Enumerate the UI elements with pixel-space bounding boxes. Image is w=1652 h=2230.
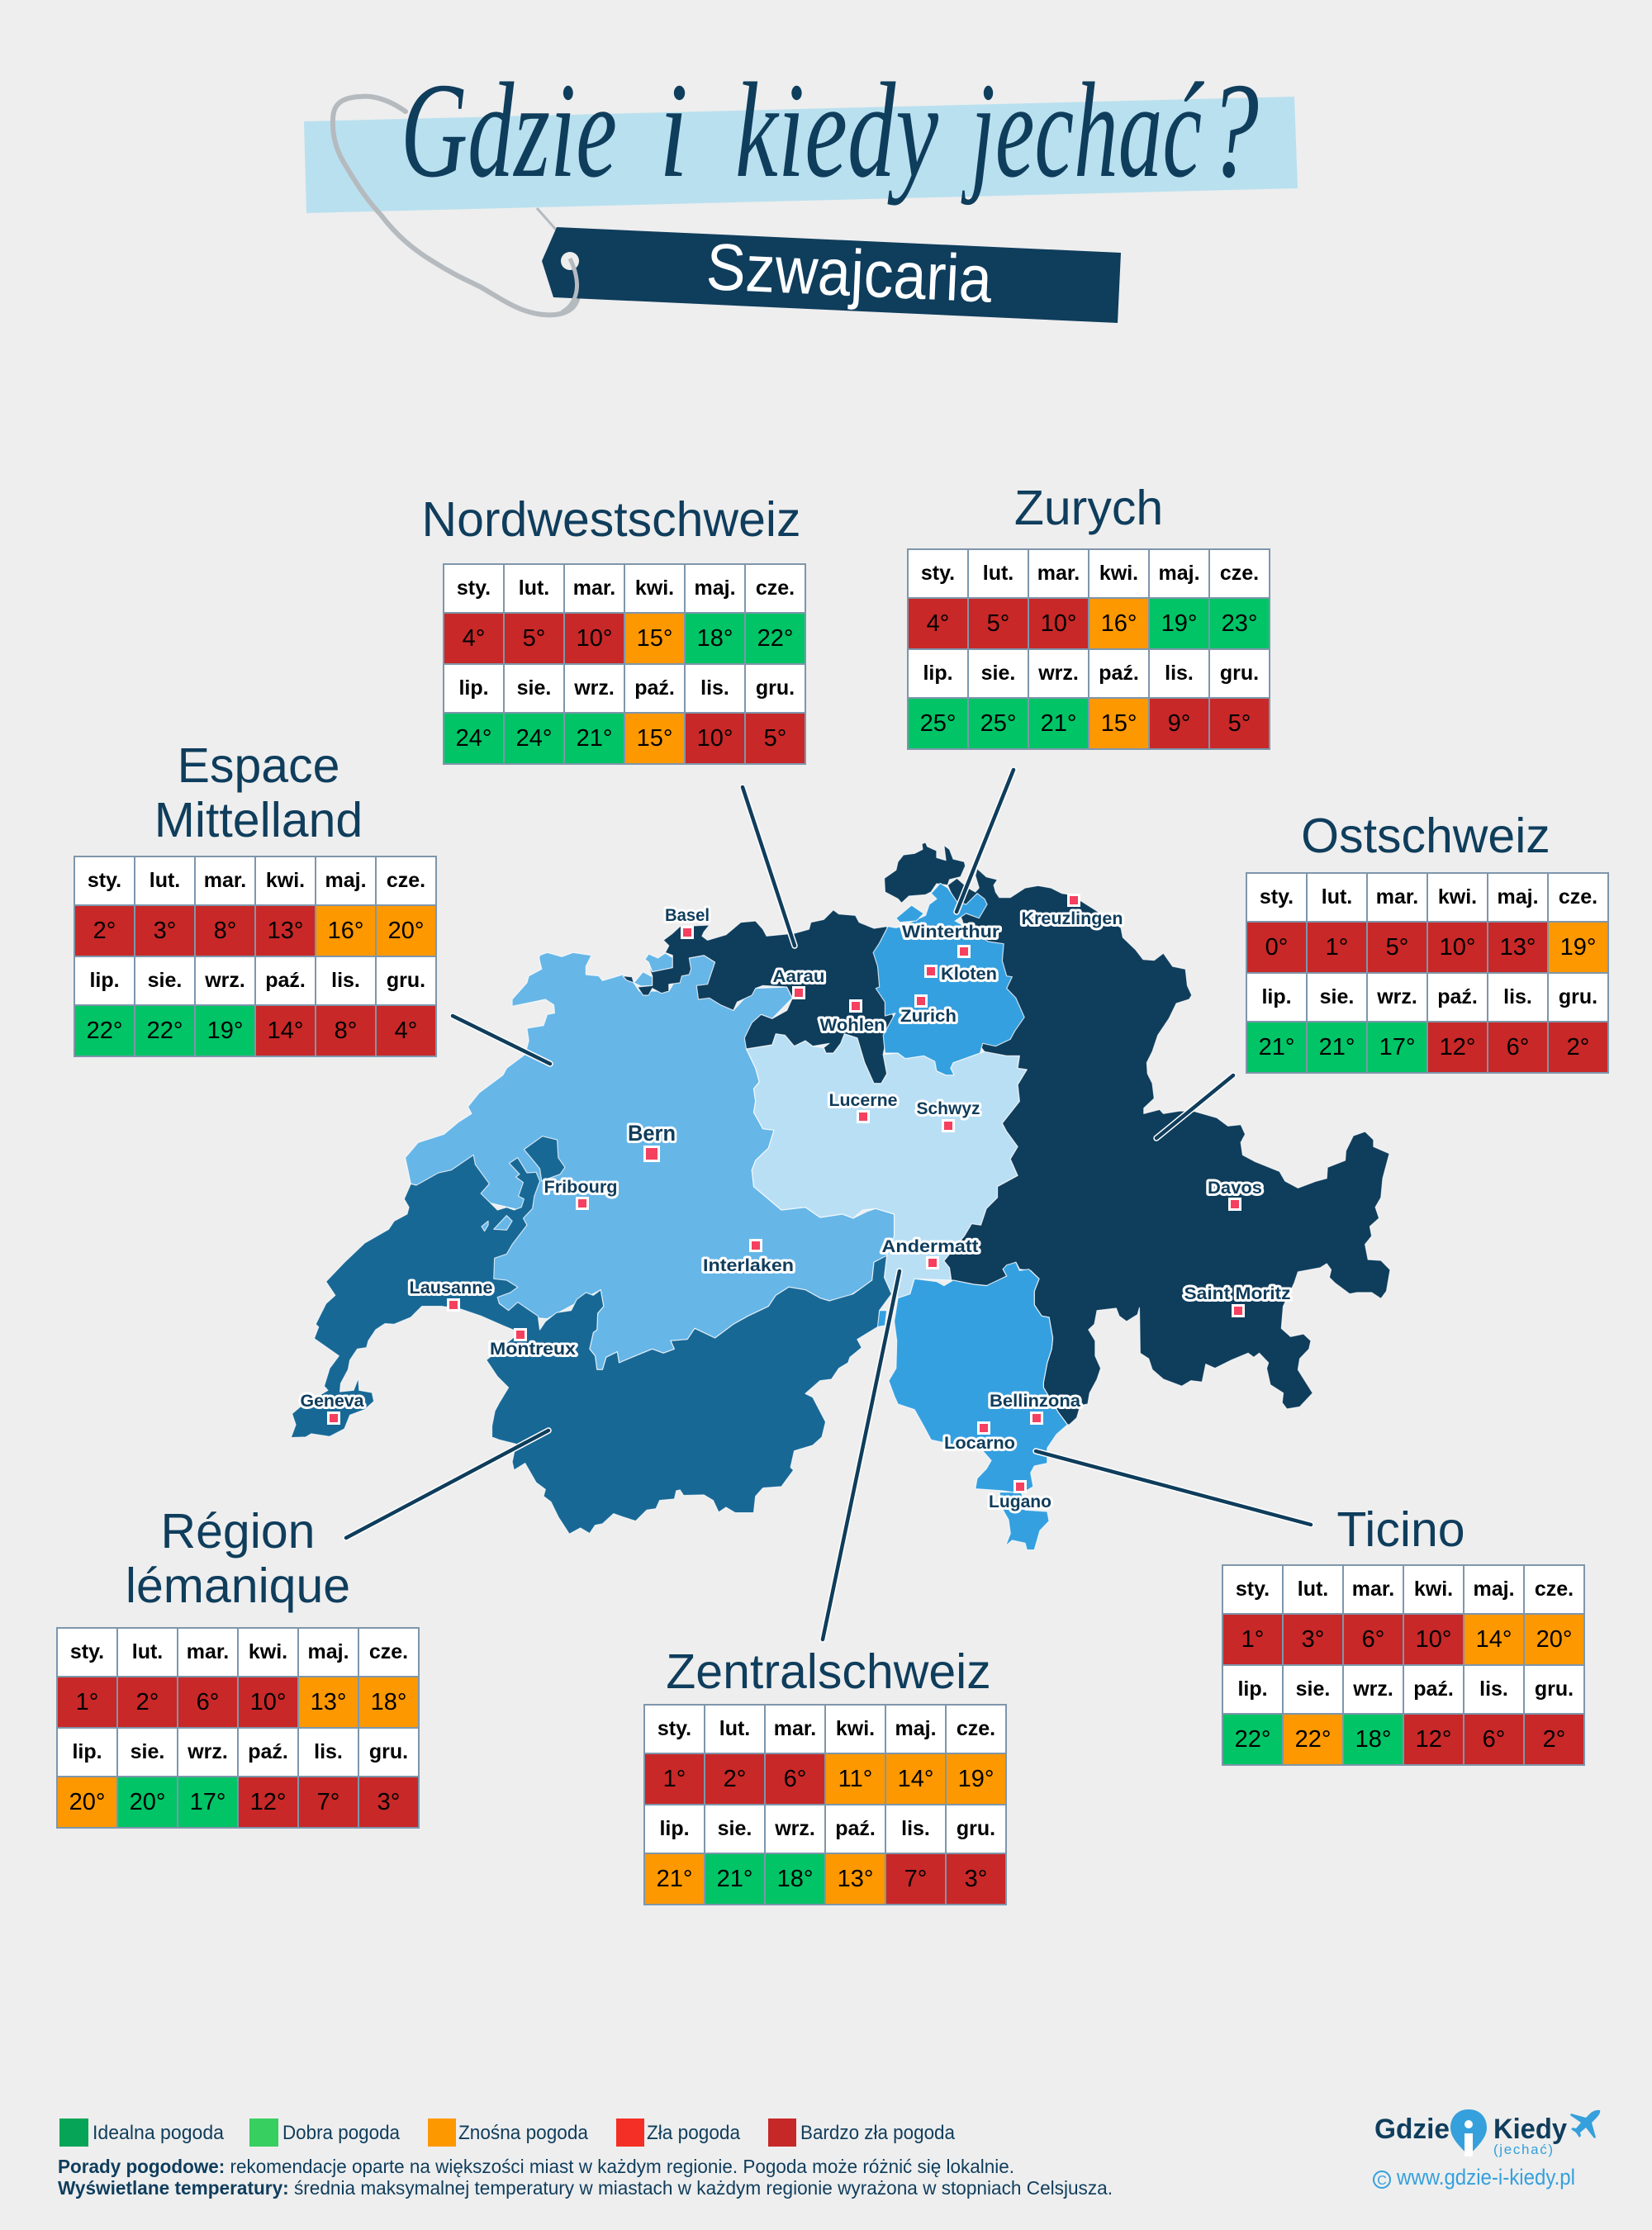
- table: Nordwestschweiz: 21°: [577, 725, 612, 752]
- table: Ostschweiz: 10°: [1440, 933, 1475, 960]
- table: Zurych: paź.: [1099, 662, 1139, 685]
- table: Ticino: kwi.: [1414, 1578, 1453, 1601]
- string end: [562, 259, 577, 312]
- title: jechać: [961, 55, 1204, 206]
- table: Ostschweiz: [1246, 872, 1609, 1074]
- table: Région lémanique: 13°: [311, 1688, 346, 1715]
- table: Espace Mittelland: 4°: [395, 1018, 417, 1044]
- city: Fribourg: [544, 1178, 618, 1210]
- table: Ostschweiz: 2°: [1567, 1034, 1589, 1060]
- city: Lausanne: [410, 1279, 492, 1312]
- city: Kreuzlingen: Kreuzlingen: [1021, 909, 1123, 928]
- city: Locarno: Locarno: [944, 1434, 1015, 1453]
- table: Zurych: wrz.: [1038, 662, 1079, 685]
- table: Espace Mittelland: 14°: [268, 1018, 303, 1044]
- city: Kloten: Kloten: [941, 965, 997, 984]
- table: Zentralschweiz: 6°: [784, 1766, 806, 1792]
- city: Davos: [1208, 1179, 1262, 1211]
- title: Gdzie: [401, 55, 617, 206]
- panel: Nordwestschweiz: [421, 492, 806, 765]
- heading: Espace Mittelland: Espace: [178, 738, 339, 793]
- city: Basel: Basel: [665, 906, 710, 925]
- table: Ostschweiz: paź.: [1437, 985, 1478, 1008]
- table: Zurych: lut.: [983, 562, 1014, 585]
- region: Région lémanique: [291, 1136, 891, 1534]
- legend: Idealna pogoda: [59, 2118, 225, 2147]
- heading: Nordwestschweiz: Nordwestschweiz: [421, 492, 801, 547]
- table: Ticino: 22°: [1235, 1726, 1270, 1753]
- table: Zentralschweiz: gru.: [957, 1817, 995, 1840]
- table: Zurych: 15°: [1101, 710, 1137, 737]
- table: Espace Mittelland: kwi.: [266, 869, 305, 892]
- table: Ticino: 18°: [1355, 1726, 1391, 1753]
- table: Zentralschweiz: lis.: [901, 1817, 930, 1840]
- city: Lucerne: [829, 1091, 897, 1123]
- table: Région lémanique: 17°: [190, 1789, 225, 1815]
- table: Ticino: sty.: [1236, 1578, 1270, 1601]
- heading: Espace Mittelland: [154, 738, 363, 847]
- table: Nordwestschweiz: 15°: [637, 624, 672, 651]
- table: Espace Mittelland: 2°: [93, 917, 116, 943]
- city: Lucerne: Lucerne: [829, 1091, 897, 1110]
- legend: Bardzo zła pogoda: [768, 2118, 956, 2147]
- table: Ticino: mar.: [1352, 1578, 1394, 1601]
- table: Région lémanique: 18°: [371, 1688, 406, 1715]
- table: Zurych: sie.: [981, 662, 1015, 685]
- table: Ticino: 6°: [1362, 1625, 1384, 1652]
- table: Ticino: lis.: [1479, 1677, 1508, 1701]
- table: Zurych: 4°: [927, 610, 949, 636]
- table: Ticino: 12°: [1416, 1726, 1451, 1753]
- table: Région lémanique: lip.: [72, 1740, 102, 1763]
- icon: copyright: C: [1377, 2174, 1387, 2188]
- table: Nordwestschweiz: 22°: [757, 624, 793, 651]
- region: Ostschweiz: [885, 842, 1390, 1425]
- city: Saint Moritz: Saint Moritz: [1184, 1284, 1290, 1303]
- table: Nordwestschweiz: 24°: [516, 725, 552, 752]
- leader line: Zentralschweiz: [823, 1271, 900, 1639]
- table: Zurych: 16°: [1101, 610, 1137, 636]
- city: Schwyz: [917, 1099, 980, 1132]
- table: Zentralschweiz: mar.: [774, 1717, 816, 1740]
- table: Région lémanique: sty.: [70, 1640, 104, 1663]
- table: Espace Mittelland: 20°: [388, 917, 424, 943]
- table: Ostschweiz: 17°: [1379, 1034, 1415, 1060]
- table: Espace Mittelland: 3°: [154, 917, 176, 943]
- legend: Idealna pogoda: Idealna pogoda: [93, 2122, 225, 2144]
- city: Montreux: Montreux: [490, 1340, 576, 1359]
- table: Zurych: [907, 548, 1270, 750]
- table: Zentralschweiz: lip.: [659, 1817, 690, 1840]
- table: Ticino: lip.: [1237, 1677, 1268, 1701]
- table: Région lémanique: gru.: [369, 1740, 408, 1763]
- city: Bellinzona: Bellinzona: [990, 1392, 1080, 1411]
- table: Ostschweiz: 5°: [1386, 933, 1408, 960]
- table: Nordwestschweiz: 24°: [456, 725, 491, 752]
- heading: Zentralschweiz: Zentralschweiz: [666, 1644, 991, 1699]
- table: Zentralschweiz: [643, 1704, 1007, 1905]
- city: Andermatt: [882, 1237, 979, 1269]
- city: Winterthur: [902, 923, 999, 958]
- legend: [59, 2118, 956, 2147]
- map of Switzerland: [291, 842, 1390, 1550]
- table: Nordwestschweiz: paź.: [634, 676, 675, 700]
- table: Zentralschweiz: sty.: [657, 1717, 691, 1740]
- city: Andermatt: Andermatt: [882, 1237, 979, 1256]
- table: Zentralschweiz: 3°: [965, 1865, 987, 1891]
- legend: Zła pogoda: Zła pogoda: [647, 2122, 741, 2144]
- legend: Zła pogoda: [616, 2118, 741, 2147]
- table: Région lémanique: paź.: [248, 1740, 288, 1763]
- heading: Région lémanique: Région: [161, 1504, 315, 1559]
- table: Région lémanique: 12°: [250, 1789, 286, 1815]
- table: Espace Mittelland: wrz.: [205, 969, 245, 992]
- table: Zentralschweiz: paź.: [835, 1817, 876, 1840]
- city: Zurich: Zurich: [900, 1007, 957, 1026]
- table: Espace Mittelland: 8°: [214, 917, 236, 943]
- table: Espace Mittelland: 19°: [207, 1018, 243, 1044]
- table: Ostschweiz: lut.: [1322, 885, 1352, 909]
- table: Région lémanique: lis.: [314, 1740, 343, 1763]
- table: Ticino: 14°: [1476, 1625, 1512, 1652]
- table: Espace Mittelland: sty.: [88, 869, 121, 892]
- table: Ostschweiz: lip.: [1261, 985, 1292, 1008]
- table: Ostschweiz: maj.: [1497, 885, 1539, 909]
- table: Ostschweiz: 1°: [1326, 933, 1348, 960]
- table: Zurych: 10°: [1041, 610, 1076, 636]
- table: Ticino: gru.: [1535, 1677, 1574, 1701]
- table: Zentralschweiz: 13°: [838, 1865, 873, 1891]
- table: Ostschweiz: 19°: [1560, 933, 1596, 960]
- table: Zentralschweiz: 19°: [958, 1766, 994, 1792]
- logo word: Gdzie: Gdzie: [1374, 2114, 1450, 2145]
- logo: [1374, 2109, 1600, 2190]
- note: displayed temperatures: Wyświetlane temperatury: średnia maksymalnej temperatury w miastach w każdym regionie wyrażona w stopniach Celsjusza.: [58, 2177, 1113, 2199]
- table: Ostschweiz: lis.: [1503, 985, 1532, 1008]
- table: Ticino: 10°: [1416, 1625, 1451, 1652]
- table: Zentralschweiz: sie.: [718, 1817, 752, 1840]
- table: Ticino: maj.: [1473, 1578, 1515, 1601]
- heading: Région lémanique: [126, 1504, 350, 1613]
- table: Nordwestschweiz: sty.: [457, 576, 491, 600]
- panel: Ostschweiz: [1246, 809, 1609, 1074]
- heading: Espace Mittelland: Mittelland: [154, 793, 363, 847]
- panel: Espace Mittelland: [74, 738, 437, 1057]
- table: Zurych: lis.: [1165, 662, 1194, 685]
- table: Ticino: 20°: [1536, 1625, 1572, 1652]
- table: Zentralschweiz: maj.: [895, 1717, 937, 1740]
- string loop: [333, 97, 578, 315]
- city: Wohlen: [819, 999, 885, 1035]
- table: Nordwestschweiz: 15°: [637, 725, 672, 752]
- note: weather advice: Porady pogodowe: rekomendacje oparte na większości miast w każdym regionie. Pogoda może różnić się lokalnie.: [58, 2156, 1014, 2177]
- city: Geneva: [301, 1392, 364, 1425]
- leader line: Nordwestschweiz: [743, 787, 795, 946]
- subtitle: Szwajcaria: [705, 230, 994, 316]
- table: Espace Mittelland: cze.: [387, 869, 425, 892]
- table: Zurych: 23°: [1222, 610, 1257, 636]
- city: Bern: Bern: [628, 1121, 676, 1146]
- table: Nordwestschweiz: lip.: [458, 676, 489, 700]
- table: Ticino: paź.: [1413, 1677, 1454, 1701]
- table: Nordwestschweiz: maj.: [694, 576, 736, 600]
- legend: Znośna pogoda: [428, 2118, 589, 2147]
- table: Nordwestschweiz: lis.: [700, 676, 729, 700]
- city: Interlaken: [703, 1239, 794, 1275]
- table: Ostschweiz: 21°: [1319, 1034, 1355, 1060]
- table: Ticino: wrz.: [1353, 1677, 1393, 1701]
- table: Région lémanique: 7°: [317, 1789, 339, 1815]
- title banner: [304, 97, 1298, 213]
- table: Zurych: kwi.: [1099, 562, 1138, 585]
- region: Nordwestschweiz: [623, 910, 894, 1084]
- legend: Dobra pogoda: [249, 2118, 401, 2147]
- icon: copyright: [1374, 2171, 1390, 2188]
- table: Espace Mittelland: [74, 856, 437, 1057]
- city: Montreux: [490, 1328, 576, 1359]
- table: Zurych: 5°: [1228, 710, 1251, 737]
- table: Ticino: 6°: [1483, 1726, 1505, 1753]
- table: Zurych: sty.: [921, 562, 955, 585]
- table: Zentralschweiz: 21°: [657, 1865, 692, 1891]
- panel: Zentralschweiz: [643, 1644, 1007, 1905]
- table: Région lémanique: [56, 1627, 420, 1829]
- city: Schwyz: Schwyz: [917, 1099, 980, 1118]
- table: Nordwestschweiz: 5°: [764, 725, 786, 752]
- region: Zurych: [873, 883, 1024, 1075]
- table: Ostschweiz: 21°: [1259, 1034, 1294, 1060]
- title: [401, 55, 1259, 206]
- table: Région lémanique: lut.: [132, 1640, 163, 1663]
- table: Ticino: 2°: [1543, 1726, 1565, 1753]
- table: Zurych: 25°: [920, 710, 956, 737]
- table: Espace Mittelland: gru.: [387, 969, 425, 992]
- table: Nordwestschweiz: 4°: [463, 624, 485, 651]
- table: Ticino: 3°: [1302, 1625, 1324, 1652]
- city: Interlaken: Interlaken: [703, 1256, 794, 1275]
- icon: plane: [1570, 2110, 1600, 2138]
- table: Espace Mittelland: mar.: [204, 869, 246, 892]
- city: Basel: [665, 906, 710, 939]
- table: Zentralschweiz: 7°: [904, 1865, 927, 1891]
- string to tag: [537, 208, 556, 230]
- table: Espace Mittelland: lut.: [150, 869, 180, 892]
- table: Zurych: maj.: [1158, 562, 1200, 585]
- table: Nordwestschweiz: kwi.: [635, 576, 674, 600]
- table: Zentralschweiz: kwi.: [836, 1717, 875, 1740]
- table: Zurych: 9°: [1168, 710, 1190, 737]
- table: Ostschweiz: wrz.: [1377, 985, 1417, 1008]
- table: Zurych: 25°: [980, 710, 1016, 737]
- table: Zurych: gru.: [1220, 662, 1259, 685]
- table: Région lémanique: 2°: [136, 1688, 159, 1715]
- table: Nordwestschweiz: 5°: [523, 624, 545, 651]
- city: Zurich: [900, 994, 957, 1026]
- heading: Ostschweiz: Ostschweiz: [1301, 809, 1550, 863]
- table: Nordwestschweiz: sie.: [517, 676, 551, 700]
- city: Saint Moritz: [1184, 1284, 1290, 1317]
- table: Ticino: cze.: [1535, 1578, 1574, 1601]
- logo pin: [1450, 2109, 1487, 2156]
- table: Nordwestschweiz: 10°: [697, 725, 733, 752]
- title: i: [659, 55, 688, 206]
- table: Nordwestschweiz: 10°: [577, 624, 612, 651]
- region: Espace Mittelland: [406, 952, 895, 1369]
- table: Espace Mittelland: 22°: [87, 1018, 122, 1044]
- table: Ostschweiz: sie.: [1320, 985, 1354, 1008]
- city: Kreuzlingen: [1021, 894, 1123, 928]
- logo word: jechać: (jechać): [1493, 2142, 1553, 2157]
- table: Zentralschweiz: 21°: [717, 1865, 752, 1891]
- table: Nordwestschweiz: gru.: [756, 676, 795, 700]
- panel: Région lémanique: [56, 1504, 420, 1829]
- leader line: Espace Mittelland: [453, 1016, 550, 1064]
- table: Zentralschweiz: 11°: [838, 1766, 872, 1792]
- table: Zentralschweiz: 1°: [663, 1766, 686, 1792]
- table: Nordwestschweiz: mar.: [573, 576, 615, 600]
- city: Fribourg: Fribourg: [544, 1178, 618, 1197]
- heading: Région lémanique: lémanique: [126, 1559, 350, 1613]
- table: Espace Mittelland: sie.: [148, 969, 182, 992]
- city: Davos: Davos: [1208, 1179, 1262, 1198]
- table: Espace Mittelland: 13°: [268, 917, 303, 943]
- table: Zentralschweiz: 18°: [777, 1865, 813, 1891]
- title: ?: [1208, 55, 1259, 206]
- table: Région lémanique: 1°: [76, 1688, 98, 1715]
- city: Bellinzona: [990, 1392, 1080, 1425]
- panel: Zurych: [907, 481, 1270, 750]
- table: Zurych: 21°: [1041, 710, 1076, 737]
- table: Espace Mittelland: lip.: [89, 969, 120, 992]
- table: Zurych: cze.: [1220, 562, 1259, 585]
- table: Espace Mittelland: 16°: [328, 917, 363, 943]
- city: Aarau: [773, 967, 824, 999]
- table: Région lémanique: 3°: [377, 1789, 400, 1815]
- table: Ticino: lut.: [1298, 1578, 1328, 1601]
- table: Zentralschweiz: lut.: [719, 1717, 750, 1740]
- legend: Znośna pogoda: Znośna pogoda: [458, 2122, 589, 2144]
- title: kiedy: [735, 55, 939, 206]
- table: Ostschweiz: mar.: [1376, 885, 1418, 909]
- table: Ostschweiz: 13°: [1500, 933, 1536, 960]
- heading: Ticino: Ticino: [1336, 1502, 1465, 1557]
- legend: Bardzo zła pogoda: Bardzo zła pogoda: [800, 2122, 956, 2144]
- city: Geneva: Geneva: [301, 1392, 364, 1411]
- table: Nordwestschweiz: lut.: [519, 576, 549, 600]
- table: Région lémanique: 20°: [69, 1789, 105, 1815]
- heading: Zurych: Zurych: [1014, 481, 1163, 535]
- table: Zurych: 19°: [1161, 610, 1197, 636]
- website: www.gdzie-i-kiedy.pl: [1396, 2165, 1575, 2190]
- table: Région lémanique: maj.: [307, 1640, 349, 1663]
- leader line: Ostschweiz: [1156, 1075, 1233, 1138]
- table: Région lémanique: mar.: [187, 1640, 229, 1663]
- panel: Ticino: [1222, 1502, 1585, 1766]
- table: Région lémanique: cze.: [369, 1640, 408, 1663]
- city: Locarno: [944, 1421, 1015, 1453]
- table: Ostschweiz: cze.: [1559, 885, 1597, 909]
- city: Lausanne: Lausanne: [410, 1279, 492, 1298]
- table: Zentralschweiz: wrz.: [775, 1817, 815, 1840]
- table: Ticino: 1°: [1241, 1625, 1264, 1652]
- country tag: [542, 227, 1121, 323]
- table: Espace Mittelland: 22°: [147, 1018, 183, 1044]
- table: Nordwestschweiz: [443, 563, 806, 765]
- table: Espace Mittelland: 8°: [335, 1018, 357, 1044]
- table: Ostschweiz: 0°: [1265, 933, 1288, 960]
- table: Région lémanique: wrz.: [188, 1740, 228, 1763]
- table: Ostschweiz: gru.: [1559, 985, 1597, 1008]
- table: Zurych: lip.: [923, 662, 953, 685]
- table: Zentralschweiz: cze.: [957, 1717, 995, 1740]
- table: Ticino: sie.: [1296, 1677, 1330, 1701]
- table: Ticino: 22°: [1295, 1726, 1331, 1753]
- table: Région lémanique: 20°: [130, 1789, 165, 1815]
- table: Zurych: mar.: [1037, 562, 1080, 585]
- table: Région lémanique: 6°: [197, 1688, 219, 1715]
- city: Wohlen: Wohlen: [819, 1016, 885, 1035]
- table: Ostschweiz: 6°: [1507, 1034, 1529, 1060]
- table: Zentralschweiz: 14°: [898, 1766, 933, 1792]
- region: Ticino: [877, 1262, 1067, 1550]
- leader line: Région lémanique: [346, 1431, 548, 1538]
- table: Nordwestschweiz: cze.: [756, 576, 795, 600]
- table: Espace Mittelland: lis.: [331, 969, 360, 992]
- table: Ostschweiz: sty.: [1260, 885, 1294, 909]
- table: Espace Mittelland: paź.: [265, 969, 306, 992]
- city: Aarau: Aarau: [773, 967, 824, 986]
- logo word: Kiedy: Kiedy: [1493, 2114, 1567, 2145]
- table: Zurych: 5°: [987, 610, 1009, 636]
- table: Nordwestschweiz: wrz.: [574, 676, 615, 700]
- city: Lugano: [989, 1480, 1051, 1511]
- table: Région lémanique: sie.: [131, 1740, 164, 1763]
- city: Winterthur: Winterthur: [902, 923, 999, 942]
- table: Ostschweiz: 12°: [1440, 1034, 1475, 1060]
- table: Zentralschweiz: 2°: [724, 1766, 746, 1792]
- region: Zentralschweiz: [747, 1034, 1027, 1298]
- legend: Dobra pogoda: Dobra pogoda: [282, 2122, 401, 2144]
- city: Lugano: Lugano: [989, 1492, 1051, 1511]
- table: Région lémanique: kwi.: [249, 1640, 287, 1663]
- city: Bern: [628, 1121, 676, 1162]
- table: Ticino: [1222, 1564, 1585, 1766]
- tag hole: [561, 252, 579, 270]
- leader line: Zurych: [957, 770, 1014, 912]
- table: Nordwestschweiz: 18°: [697, 624, 733, 651]
- leader line: Ticino: [1036, 1451, 1311, 1525]
- table: Espace Mittelland: maj.: [325, 869, 367, 892]
- table: Région lémanique: 10°: [250, 1688, 286, 1715]
- table: Ostschweiz: kwi.: [1438, 885, 1477, 909]
